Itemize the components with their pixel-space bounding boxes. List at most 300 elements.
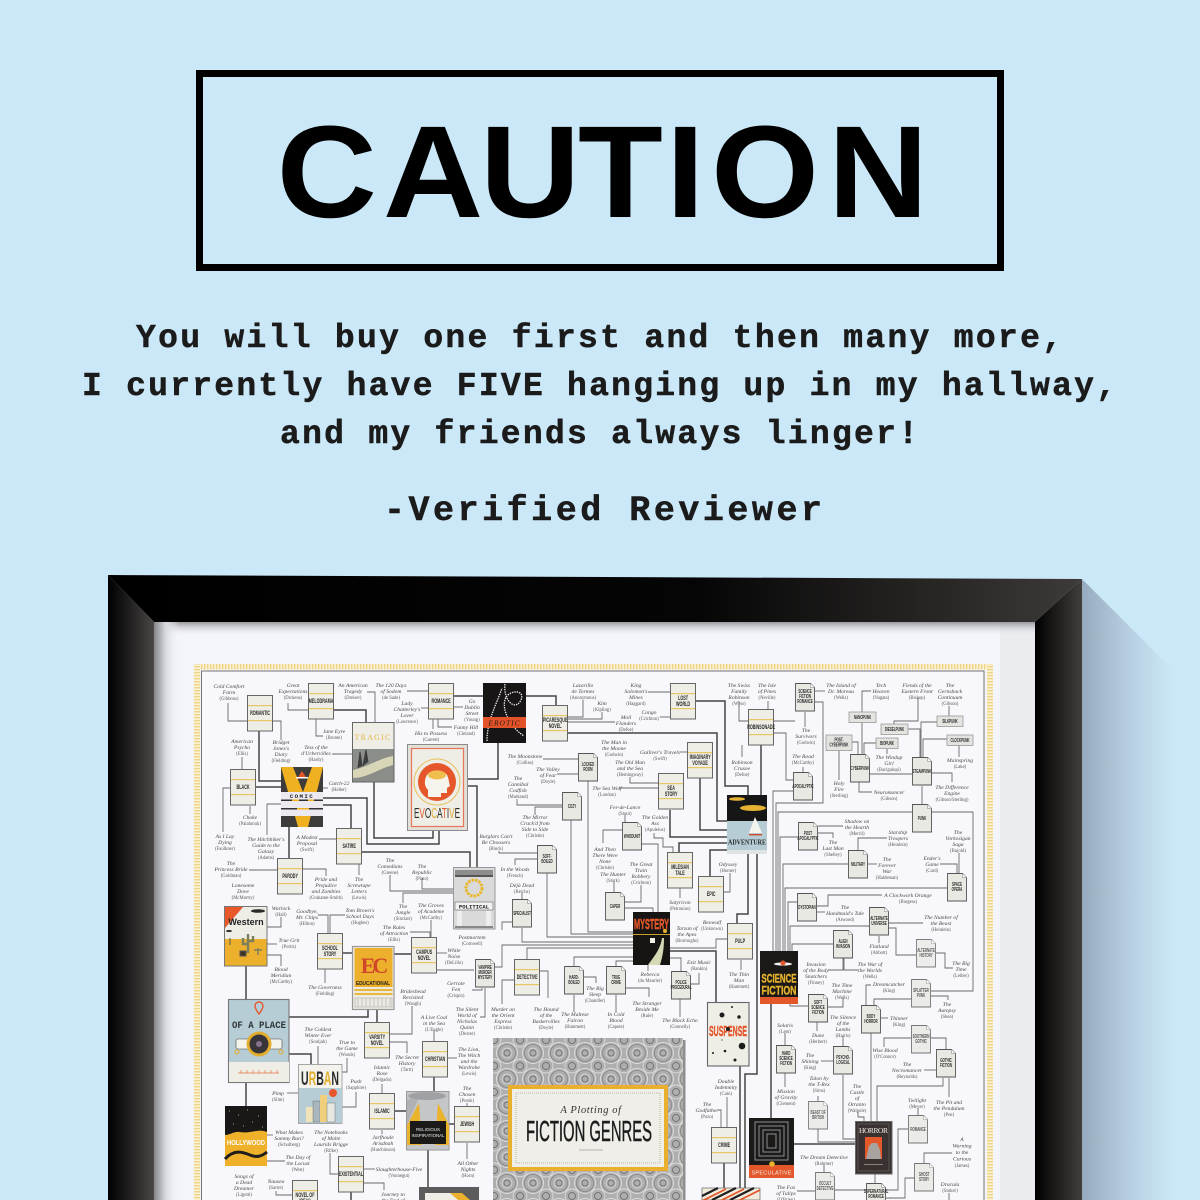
book: Catch-22: Catch-22: [329, 781, 349, 787]
book: The Hunter: The Hunter: [600, 872, 626, 878]
page: occult detective: DETECTIVE: [817, 1185, 834, 1191]
book: Bridget Jones's Diary: Jones's: [273, 746, 289, 752]
book: The Notebooks of Malte Laurids Brigge: Laurids Brigge: [313, 1142, 349, 1148]
page: alien invasion: INVASION: [836, 943, 850, 949]
page: steampunk: STEAMPUNK: [913, 768, 931, 774]
book: The Thin Man: Man: [733, 978, 744, 984]
book: The Lion, The Witch and the Wardrobe: The Witch: [458, 1053, 480, 1059]
page: cozy: [562, 792, 582, 820]
book: An American Tragedy: Tragedy: [344, 689, 363, 695]
page: alternate universe: ALTERNATE: [870, 915, 888, 921]
book: Lazarillo de Tormes: Lazarillo: [573, 683, 593, 689]
cover: tragic: TRAGIC: [355, 733, 391, 742]
book: In Cold Blood: Blood: [609, 1018, 623, 1024]
book: Gulliver's Travels: Gulliver's Travels: [640, 750, 680, 756]
cover: urban: [298, 1064, 342, 1124]
page: dystopian: DYSTOPIAN: [798, 904, 816, 910]
card: varsity novel: NOVEL: [371, 1040, 384, 1047]
card: sea story: [658, 774, 684, 809]
book: The Road: (McCarthy): [792, 761, 814, 766]
book: Shadow on the Hearth: (Merril): [849, 832, 865, 837]
page: steampunk: [912, 758, 932, 785]
book: Goodbye, Mr. Chips: Mr. Chips: [295, 915, 318, 921]
book: The Old Man and the Sea: The Old Man: [615, 760, 645, 766]
tag: clockpunk: CLOCKPUNK: [950, 737, 970, 743]
book: The Castle of Otranto: Castle: [850, 1090, 865, 1096]
book: The Day of the Locust: (West): [292, 1168, 305, 1173]
book: The Pit and the Pendulum: The Pit and: [936, 1100, 962, 1106]
book: The Silent World of Nicholas Quinn: Quinn: [460, 1025, 474, 1031]
book: The Chosen: (Potok): [460, 1099, 474, 1104]
book: Invasion of the Body Snatchers: Invasion: [806, 962, 826, 968]
page: alternate universe: UNIVERSE: [871, 920, 887, 926]
book: The 120 Days of Sodom: (de Sade): [382, 696, 400, 701]
book: Wise Blood: Wise Blood: [872, 1048, 898, 1054]
book: The Maltese Falcon: (Hammett): [565, 1025, 586, 1030]
book: Pride and Prejudice and Zombies: and Zombies: [312, 889, 340, 895]
book: Slaughterhouse-Five: (Vonnegut): [388, 1174, 410, 1179]
page: whodunit: WHODUNIT: [624, 833, 641, 839]
book: The Governess: (Fielding): [316, 992, 335, 997]
page: apocalyptic: [792, 772, 814, 800]
book: The Mirror Crack'd from Side to Side: Crack'd from: [520, 820, 550, 827]
book: Rebecca: Rebecca: [641, 972, 659, 978]
cover: adventure: ADVENTURE: [728, 838, 766, 846]
card: parody: PARODY: [282, 873, 298, 880]
book: The Windup Girl: The Windup: [876, 755, 902, 761]
book: The Hunter: (Stark): [606, 879, 620, 884]
page: romance: ROMANCE: [910, 1126, 926, 1132]
book: Songs of a Dead Dreamer: (Ligotti): [236, 1193, 252, 1198]
book: The Great Train Robbery: The Great: [630, 862, 652, 868]
book: The 120 Days of Sodom: The 120 Days: [375, 683, 407, 689]
book: His to Possess: His to Possess: [415, 731, 447, 737]
book: A Warning to the Curious: Warning: [952, 1144, 972, 1150]
tag: dieselpunk: DIESELPUNK: [885, 726, 904, 732]
book: Go Dublin Street: Dublin: [463, 705, 480, 711]
book: The Shining: (King): [804, 1066, 817, 1071]
book: The Gernsback Continuum: Gernsback: [938, 689, 963, 695]
book: The Island of Dr. Moreau: The Island of: [826, 683, 856, 689]
book: Burglars Can't Be Choosers: Burglars Can't: [479, 834, 513, 840]
book: All Other Nights: All Other: [458, 1161, 478, 1167]
book: Bridget Jones's Diary: Diary: [273, 752, 288, 758]
cover: educational: [352, 946, 394, 1010]
page: alternate history: ALTERNATE: [917, 947, 935, 953]
picture frame: [108, 575, 1082, 1200]
book: The Forever War: (Haldeman): [876, 876, 899, 881]
card: school story: SCHOOL: [322, 945, 338, 952]
book: The Screwtape Letters: The: [355, 877, 363, 883]
book: In Cold Blood: (Capote): [608, 1025, 625, 1030]
card: sea story: STORY: [665, 791, 678, 798]
book: Blood Meridian: (McCarthy): [270, 980, 292, 985]
book: The Handmaid's Tale: The: [841, 905, 849, 911]
card: pulp: [728, 924, 752, 959]
book: The Republic: The: [418, 864, 426, 870]
book: Catch-22: (Heller): [332, 788, 347, 793]
book: The Old Man and the Sea: and the Sea: [617, 766, 643, 772]
page: supernatural romance: [864, 1184, 889, 1200]
book: Twilight: Twilight: [908, 1098, 926, 1104]
page: specialist: SPECIALIST: [513, 910, 531, 916]
card: satire: SATIRE: [342, 843, 356, 850]
book: Robinson Crusoe: Crusoe: [734, 766, 751, 772]
page: body horror: [862, 1006, 880, 1033]
book: The Man in the Moone: the Moone: [602, 746, 626, 752]
card: campus novel: CAMPUS: [416, 949, 432, 956]
book: Dune: Dune: [812, 1033, 824, 1039]
book: Invasion of the Body Snatchers: Snatchers: [805, 974, 827, 980]
card: milesian tale: MILESIAN: [671, 864, 689, 871]
page: police procedural: [671, 972, 692, 999]
page: hard-boiled: HARD-: [569, 974, 579, 980]
book: The Isle of Pines: of Pines: [758, 688, 776, 695]
cover: western: [224, 906, 267, 966]
page: vampire murder mystery: MURDER: [478, 969, 492, 975]
book: Choke: (Palahniuk): [239, 822, 261, 827]
book: Tech Heaven: Heaven: [871, 689, 890, 695]
card: novel of ideas: NOVEL OF: [296, 1192, 314, 1199]
book: Blood Meridian: Meridian: [270, 973, 292, 979]
book: Murder on the Orient Express: Express: [493, 1019, 512, 1025]
title plate: fiction genres: A Plotting of: [559, 1105, 623, 1116]
tag: silkpunk: SILKPUNK: [942, 718, 958, 724]
book: The Godfather: The: [703, 1102, 711, 1108]
cover: of a place: OF A PLACE: [232, 1020, 286, 1032]
book: Journey to the End of: Journey to: [381, 1192, 405, 1198]
book: The Silence of the Lambs: Lambs: [835, 1027, 850, 1033]
page: soft science fiction: [808, 994, 828, 1022]
page: space opera: OPERA: [952, 886, 962, 892]
page: ghost story: [914, 1164, 934, 1191]
book: Lonesome Dove: Lonesome: [232, 883, 254, 889]
page: alien invasion: ALIEN: [839, 938, 847, 944]
card: epic: EPIC: [707, 891, 716, 898]
book: The Autopsy: Autopsy: [937, 1008, 957, 1014]
book: The Coldest Winter Ever: (Souljah): [309, 1040, 327, 1045]
book: A Live Coal in the Sea: in the Sea: [423, 1021, 445, 1027]
book: Ender's Game: Ender's: [923, 856, 941, 862]
book: Songs of a Dead Dreamer: Dreamer: [233, 1186, 255, 1192]
page: southern gothic: GOTHIC: [915, 1038, 927, 1044]
book: A Clockwork Orange: (Burgess): [899, 900, 918, 905]
book: Invasion of the Body Snatchers: (Finney): [808, 981, 825, 986]
book: Jarfhoule Arisdnah: (Hutchinson): [371, 1148, 396, 1153]
cover: erotic: EROTIC: [487, 718, 521, 728]
book: In the Woods: In the Woods: [500, 867, 530, 873]
book: Starship Troopers: (Heinlein): [888, 843, 908, 848]
card: detective: DETECTIVE: [517, 974, 538, 981]
cover: hollywood: HOLLYWOOD: [227, 1138, 265, 1147]
book: Songs of a Dead Dreamer: a Dead: [236, 1180, 252, 1186]
book: The Big Sleep: (Chandler): [585, 999, 606, 1004]
card: school story: STORY: [324, 951, 337, 958]
book: The Mirror Crack'd from Side to Side: (Christie): [526, 834, 544, 839]
cover: erotic: [483, 683, 526, 743]
book: The Gernsback Continuum: The: [946, 683, 954, 689]
book: The Silent World of Nicholas Quinn: Nicholas: [456, 1019, 477, 1025]
page: space opera: SPACE: [952, 881, 962, 887]
card: novel of ideas: [292, 1180, 318, 1200]
book: Warlock: (Hall): [275, 913, 287, 918]
book: Pimp: Pimp: [272, 1091, 284, 1097]
book: The Screwtape Letters: Letters: [350, 889, 367, 895]
book: Kim: (Kipling): [593, 708, 611, 713]
mat board: [154, 622, 1035, 1200]
book: Tarzan of the Apes: Tarzan of: [676, 926, 698, 932]
text: SUSPENSE: [709, 1023, 747, 1040]
book: The 120 Days of Sodom: of Sodom: [381, 688, 401, 695]
book: The Big Time: (Leiber): [953, 974, 969, 979]
page: military: [848, 850, 868, 878]
book: Fer-de-Lance: (Stout): [618, 812, 632, 817]
book: Fiends of the Eastern Front: (Bishop): [909, 696, 926, 701]
page: soft science fiction: SOFT: [814, 999, 822, 1005]
book: The Valley of Fear: of Fear: [540, 772, 557, 779]
book: Odyssey: Odyssey: [719, 862, 737, 868]
book: The Old Man and the Sea: (Hemingway): [617, 773, 643, 778]
card: crime: CRIME: [718, 1142, 731, 1149]
book: Talon by the T-Rex: (Sims): [813, 1089, 826, 1094]
book: Robinson Crusoe: (Defoe): [735, 773, 750, 778]
book: The Godfather: (Puzo): [701, 1115, 714, 1120]
book: Blood Meridian: Blood: [274, 967, 288, 973]
book: The Big Sleep: The Big: [586, 986, 604, 992]
page: science fiction romance: FICTION: [799, 693, 811, 699]
book: The Time Machine: The Time: [832, 983, 852, 989]
book: King Solomon's Mines: King: [631, 683, 641, 689]
book: The Hound of the Baskervilles: The Hound: [533, 1007, 559, 1013]
book: Odyssey: (Homer): [720, 869, 737, 874]
card: sea story: SEA: [667, 785, 675, 792]
book: Thinner: (King): [893, 1023, 906, 1028]
book: The Swiss Family Robinson: Family: [730, 689, 747, 695]
book: Congo: (Crichton): [639, 717, 659, 722]
card: imaginary voyage: [688, 742, 712, 778]
cover: adventure: [727, 795, 767, 854]
book: The Island of Dr. Moreau: (Wells): [834, 696, 848, 701]
book: White Noise: White: [447, 948, 461, 954]
book: The Man in the Moone: (Godwin): [605, 753, 624, 758]
card: picaresque novel: PICARESQUE: [543, 717, 567, 724]
book: Pride and Prejudice and Zombies: Prejudice: [314, 883, 337, 889]
book: The Lion, The Witch and the Wardrobe: Wardrobe: [458, 1065, 480, 1071]
card: romantic: [248, 696, 272, 731]
book: The Thin Man: The Thin: [729, 972, 749, 978]
book: The Maltese Falcon: The Maltese: [561, 1012, 589, 1018]
book: Thinner: Thinner: [890, 1016, 908, 1022]
book: The Isle of Pines: (Neville): [759, 696, 776, 701]
book: Tarzan of the Apes: (Burroughs): [676, 939, 699, 944]
cover: educational: EC: [361, 953, 387, 978]
book: Dreamcatcher: Dreamcatcher: [873, 982, 905, 988]
book: Cold Comfort Farm: Farm: [222, 690, 235, 696]
page: beast of british: BEAST OF: [811, 1109, 826, 1115]
book: Slaughterhouse-Five: Slaughterhouse-Five: [376, 1167, 422, 1173]
genre cards: [230, 684, 776, 1200]
book: An American Tragedy: An American: [338, 683, 368, 689]
page: hard science fiction: SCIENCE: [779, 1055, 793, 1061]
book: The Jungle: The: [399, 904, 407, 910]
book: The Gernsback Continuum: Continuum: [938, 695, 962, 701]
book: The Notebooks of Malte Laurids Brigge: The Notebooks: [314, 1130, 348, 1136]
cover: mystery: [633, 912, 670, 965]
page: soft science fiction: SCIENCE: [811, 1004, 825, 1010]
book: Goodbye, Mr. Chips: Goodbye,: [296, 909, 318, 915]
book: The Swiss Family Robinson: (Wyss): [732, 702, 746, 707]
book: The Maltese Falcon: Falcon: [566, 1018, 583, 1024]
book: The Silent World of Nicholas Quinn: The Silent: [456, 1007, 478, 1013]
book: The Secret History: The Secret: [395, 1055, 419, 1061]
card: jewish: [454, 1106, 480, 1142]
book: Lonesome Dove: (McMurtry): [232, 896, 255, 901]
card: imaginary voyage: IMAGINARY: [690, 754, 711, 761]
book: And Then There Were None: And Then: [594, 847, 616, 853]
page: alien invasion: [834, 930, 852, 958]
book: Holy Fire: (Sterling): [830, 794, 848, 799]
book: Go Dublin Street: (Young): [464, 718, 480, 723]
page: science fiction romance: SCIENCE: [798, 688, 812, 694]
book: The Last Man: (Shelley): [824, 853, 842, 858]
book: And Then There Were None: (Christie): [596, 866, 614, 871]
book: Brideshead Revisited: Brideshead: [400, 989, 426, 995]
review quote: [82, 320, 1116, 453]
card: romantic: ROMANTIC: [250, 710, 270, 717]
card: christian: [422, 1042, 448, 1077]
book: Double Indemnity: Double: [718, 1079, 734, 1085]
card: christian: CHRISTIAN: [425, 1056, 445, 1063]
page: gothic fiction: GOTHIC: [940, 1057, 952, 1063]
book: True to the Game: (Woods): [339, 1053, 355, 1058]
book: Rebecca: (du Maurier): [638, 979, 662, 984]
page: supernatural romance: ROMANCE: [868, 1193, 884, 1199]
book: Exit Music: Exit Music: [687, 960, 711, 966]
book: The Vorkosigan Saga: Vorkosigan: [945, 836, 971, 842]
page: ghost story: GHOST: [919, 1171, 929, 1177]
card: islamic: ISLAMIC: [374, 1108, 390, 1115]
book: Lady Chatterley's Lover: Chatterley's: [394, 707, 420, 713]
book: The Golden Ass: The Golden: [642, 815, 668, 821]
card: lost world: LOST: [678, 695, 688, 702]
page: specialist: [512, 900, 532, 927]
book: Lady Chatterley's Lover: Lover: [399, 713, 414, 719]
book: The Coldest Winter Ever: The Coldest: [305, 1027, 331, 1033]
book: Push: Push: [350, 1079, 362, 1085]
book: Brideshead Revisited: (Waugh): [405, 1002, 422, 1007]
book: Murder on the Orient Express: (Christie): [494, 1026, 512, 1031]
book: The Fox of Tulips: of Tulips: [776, 1190, 796, 1197]
title plate: fiction genres: [493, 1038, 686, 1200]
cover: science fiction: FICTION: [762, 984, 796, 998]
cover: horror: [856, 1122, 892, 1174]
page: beast of british: BRITISH: [812, 1114, 824, 1120]
book: The Hound of the Baskervilles: (Doyle): [539, 1026, 554, 1031]
book: An American Tragedy: (Dreiser): [345, 696, 362, 701]
book: The Silence of the Lambs: of the: [837, 1020, 850, 1027]
book: A Clockwork Orange: A Clockwork Orange: [884, 893, 932, 899]
card: melodrama: MELODRAMA: [309, 698, 334, 705]
book: The Difference Engine: The Difference: [935, 785, 969, 791]
card: detective: [514, 960, 540, 995]
book: A Modest Proposal: Proposal: [296, 841, 318, 847]
page: romance: [908, 1116, 928, 1143]
book: The Number of the Beast: The Number of: [924, 915, 958, 921]
page: alternate history: [916, 940, 936, 967]
page: post apocalyptic: POST: [804, 830, 812, 836]
book: Mainspring: Mainspring: [947, 758, 973, 764]
book: Satyricon: Satyricon: [669, 900, 691, 906]
page: psychological: [834, 1046, 852, 1074]
book: What Makes Sammy Run?: What Makes: [275, 1130, 303, 1136]
book: Starship Troopers: Starship: [889, 830, 907, 836]
book: Go Dublin Street: Go: [469, 699, 475, 705]
book: The Forever War: Forever: [877, 863, 897, 869]
book: A Warning to the Curious: A: [960, 1137, 964, 1143]
book: The Mirror Crack'd from Side to Side: The Mirror: [522, 815, 548, 821]
book: The Princess Bride: (Goldman): [221, 874, 242, 879]
page: alternate history: HISTORY: [919, 952, 933, 958]
book: The Vorkosigan Saga: The: [954, 830, 962, 836]
page: splatter punk: PUNK: [917, 992, 925, 998]
tag: post-cyberpunk: POST-: [835, 737, 843, 743]
page: police procedural: PROCEDURAL: [671, 984, 692, 990]
book: The Silent World of Nicholas Quinn: (Dexter): [459, 1032, 475, 1037]
card: romance: ROMANCE: [432, 698, 451, 705]
book: The Princess Bride: Princess Bride: [213, 867, 248, 873]
book: King Solomon's Mines: Mines: [628, 695, 643, 701]
book: The Notebooks of Malte Laurids Brigge: (Rilke): [324, 1149, 338, 1154]
book: Dune: (Herbert): [809, 1040, 827, 1045]
card: romance: [428, 684, 454, 719]
book: Great Expectations: Expectations: [278, 689, 307, 695]
book: Flatland: Flatland: [869, 944, 889, 950]
book: The Comedians: The: [386, 858, 394, 864]
card: campus novel: [412, 938, 436, 973]
page: soft science fiction: FICTION: [812, 1009, 824, 1015]
card: robinsonade: ROBINSONADE: [747, 724, 776, 731]
page: soft-boiled: SOFT-: [543, 853, 551, 859]
book: The Dream Detective: (Rohmer): [815, 1162, 834, 1167]
book: The Windup Girl: Girl: [884, 761, 894, 767]
tag: biopunk: [876, 738, 898, 748]
book: A Modest Proposal: (Swift): [300, 848, 314, 853]
book: The Great Train Robbery: Robbery: [631, 874, 651, 880]
cover: educational: EDUCATIONAL: [356, 981, 390, 987]
book: The Rules of Attraction: of Attraction: [380, 930, 408, 937]
book: The Hitchhiker's Guide to the Galaxy: Galaxy: [258, 849, 275, 855]
book: The Comedians: Comedians: [377, 864, 403, 870]
tag: post-cyberpunk: CYBERPUNK: [830, 742, 848, 748]
page: supernatural romance: SUPERNATURAL: [864, 1188, 888, 1194]
book: Tess of the d'Urbervilles: d'Urbervilles: [301, 751, 331, 757]
book: The Silence of the Lambs: (Harris): [836, 1034, 851, 1039]
cover: mystery: MYSTERY: [634, 916, 669, 933]
book: Tom Brown's School Days: (Hughes): [351, 921, 369, 926]
card: black: [230, 770, 256, 805]
book: The Great Train Robbery: (Crichton): [631, 881, 651, 886]
page: hard science fiction: HARD: [782, 1050, 790, 1056]
book: The Survivors: The: [802, 728, 810, 734]
card: jewish: JEWISH: [460, 1121, 474, 1128]
cover: urban: URBAN: [301, 1069, 339, 1090]
book: True to the Game: the Game: [336, 1046, 358, 1052]
book: Beowulf: Beowulf: [703, 920, 721, 926]
book: Wise Blood: (O'Connor): [874, 1055, 896, 1060]
book: Tess of the d'Urbervilles: (Hardy): [309, 758, 324, 763]
book: Lazarillo de Tormes: de Tormes: [572, 689, 594, 695]
book: The Necromancer: Necromancer: [891, 1068, 923, 1074]
